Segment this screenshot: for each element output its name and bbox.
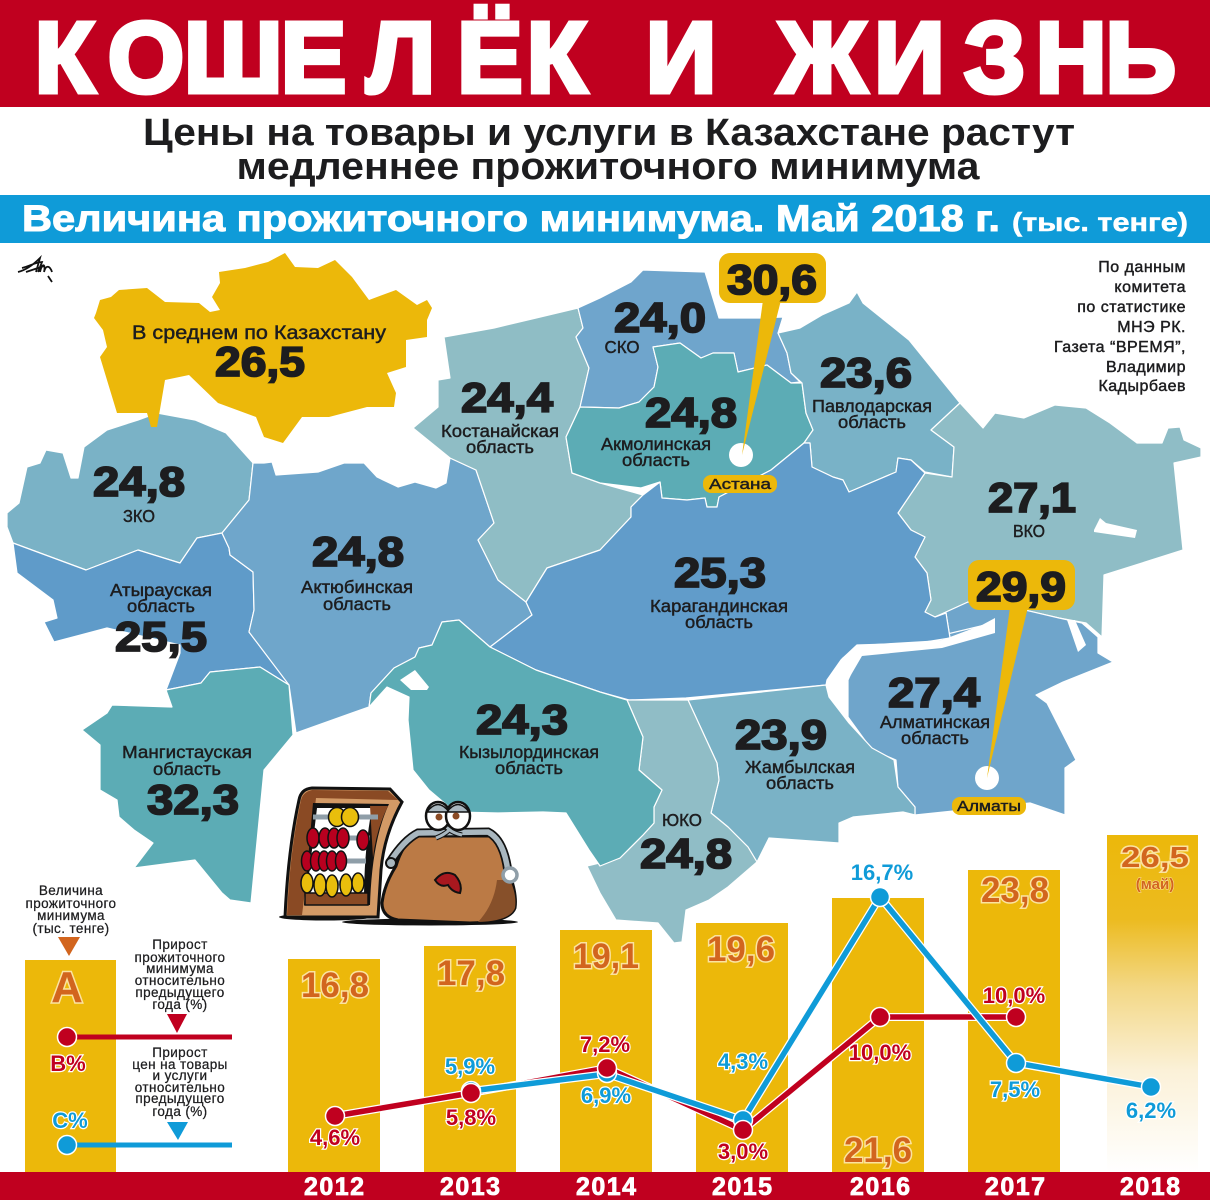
label: Мангистауская: область — [153, 759, 221, 779]
label: Павлодарская: область — [838, 412, 906, 432]
illustration: abacus — [279, 788, 402, 920]
line chart: living wage growth — [335, 1017, 1016, 1130]
mini map: average for Kazakhstan — [94, 253, 432, 443]
bar 2018 — [1107, 835, 1198, 1172]
label: Жамбылская: область — [766, 773, 834, 793]
blue percentage labels: 6,9% — [581, 1083, 631, 1108]
source note: Владимир — [1106, 359, 1186, 376]
legend caption: living wage — [26, 883, 116, 936]
legend caption: living wage growth: Прирост — [152, 937, 208, 952]
bar 2016 — [832, 898, 924, 1172]
label: Алматинская: область — [901, 728, 969, 748]
region: Акмолинская — [566, 343, 813, 507]
region: ЮКО — [587, 700, 757, 943]
red percentage labels: 7,2% — [580, 1032, 630, 1057]
label: ВКО: 27,1 — [988, 474, 1076, 521]
mini map: average for Kazakhstan: 26,5 — [215, 338, 305, 385]
label: Костанайская: Костанайская — [441, 421, 559, 441]
region: Алматинская — [848, 602, 1113, 815]
label: Павлодарская: 23,6 — [820, 349, 912, 396]
bar 2012 — [288, 959, 380, 1172]
red percentage labels: 5,8% — [446, 1105, 496, 1130]
blue percentage labels — [445, 860, 1176, 1123]
region: Павлодарская — [778, 292, 960, 492]
legend caption: living wage growth — [135, 937, 225, 1012]
label: Акмолинская: Акмолинская — [601, 434, 711, 454]
lake Alakol — [1067, 620, 1086, 652]
label: ЮКО: ЮКО — [662, 810, 702, 830]
region: Атырауская — [13, 533, 289, 690]
blue section heading — [0, 195, 1210, 243]
legend caption: price growth: цен на товары — [132, 1057, 228, 1072]
region: Мангистауская — [82, 667, 293, 903]
subtitle — [143, 112, 1075, 188]
bar 2017 — [968, 870, 1060, 1172]
label: СКО: 24,0 — [614, 294, 706, 341]
lake Balkhash — [828, 618, 995, 700]
bar 2014 — [560, 930, 652, 1172]
label: СКО — [604, 294, 706, 357]
label: Алматинская: Алматинская — [880, 712, 990, 732]
region: Карагандинская — [490, 443, 950, 700]
source note — [1054, 259, 1186, 395]
blue percentage labels: 5,9% — [445, 1054, 495, 1079]
value 2018: (май) — [1136, 876, 1174, 893]
callout: Астана 30,6: Астана — [709, 476, 772, 493]
bar 2015 — [696, 923, 788, 1172]
label: СКО: СКО — [604, 337, 640, 357]
callout: Алматы 29,9 — [952, 560, 1075, 815]
legend label B: В% — [50, 1051, 86, 1076]
label: Акмолинская: 24,8 — [645, 389, 737, 436]
label: Костанайская: 24,4 — [461, 374, 554, 421]
legend caption: price growth — [132, 1045, 228, 1119]
label: Акмолинская — [601, 389, 737, 470]
legend blue line — [58, 1136, 232, 1154]
label: Карагандинская — [650, 549, 788, 632]
value 2018: 26,5 — [1121, 842, 1189, 874]
region: ВКО — [898, 403, 1201, 637]
map of Kazakhstan regions — [7, 270, 1201, 943]
label: Карагандинская: Карагандинская — [650, 596, 788, 616]
icon: artist signature — [18, 258, 52, 282]
legend caption: price growth: года (%) — [152, 1104, 208, 1119]
legend caption: price growth: относительно — [135, 1080, 225, 1095]
label: Алматинская: 27,4 — [888, 669, 981, 716]
red percentage labels: 4,6% — [310, 1125, 360, 1150]
label: ЮКО — [640, 810, 732, 877]
legend caption: living wage growth: минимума — [146, 961, 214, 976]
icon: blue arrow — [167, 1122, 188, 1140]
label: Актюбинская — [301, 528, 413, 614]
lake in ВКО — [1094, 518, 1137, 538]
map labels — [93, 294, 1076, 877]
label: Жамбылская: Жамбылская — [745, 757, 855, 777]
source note: Газета “ВРЕМЯ”, — [1054, 339, 1186, 356]
legend red line — [58, 1028, 232, 1046]
label: Жамбылская: 23,9 — [735, 711, 827, 758]
source note: по статистике — [1077, 299, 1186, 316]
legend caption: living wage: (тыс. тенге) — [32, 921, 110, 936]
blue percentage labels: 16,7% — [851, 860, 913, 885]
value 2013: 17,8 — [437, 954, 505, 993]
source note: МНЭ РК. — [1117, 319, 1186, 336]
region: Актюбинская — [222, 458, 532, 733]
red percentage labels: 10,0% — [849, 1040, 911, 1065]
value 2016: 21,6 — [844, 1131, 912, 1170]
label: Актюбинская: область — [323, 594, 391, 614]
data points: living wage growth — [326, 1008, 1026, 1140]
region: Кызылординская — [369, 620, 662, 866]
illustration: wallet — [342, 802, 518, 926]
label: Мангистауская — [122, 742, 252, 823]
region: ЗКО — [7, 413, 253, 570]
label: Костанайская: область — [466, 437, 534, 457]
legend caption: living wage: минимума — [37, 908, 105, 923]
blue section heading: Величина прожиточного минимума. Май 2018 г. — [22, 198, 1000, 239]
legend caption: living wage growth: относительно — [135, 973, 225, 988]
legend label C: С% — [52, 1108, 88, 1133]
value 2012: 16,8 — [301, 966, 369, 1005]
legend bar and key — [25, 883, 232, 1172]
legend sample bar — [25, 960, 116, 1172]
callout: Астана 30,6 — [703, 253, 826, 493]
subtitle: Цены на товары и услуги в Казахстане растут — [143, 112, 1075, 154]
legend caption: living wage: Величина — [39, 883, 103, 898]
label: ЗКО: 24,8 — [93, 458, 185, 505]
label: Атырауская: область — [127, 596, 195, 616]
label: ЗКО — [93, 458, 185, 526]
bar 2013 — [424, 946, 516, 1172]
legend letter A: А — [51, 963, 83, 1012]
label: ЮКО: 24,8 — [640, 830, 732, 877]
icon: orange arrow — [58, 937, 80, 956]
region: Жамбылская — [688, 685, 915, 862]
label: Карагандинская: 25,3 — [674, 549, 766, 596]
value 2017: 23,8 — [981, 871, 1049, 910]
blue section heading: (тыс. тенге) — [1012, 207, 1188, 237]
label: Кызылординская: 24,3 — [476, 696, 568, 743]
legend caption: price growth: Прирост — [152, 1045, 208, 1060]
bar chart: living wage by year — [288, 835, 1198, 1172]
source note: По данным — [1098, 259, 1186, 276]
label: ЗКО: ЗКО — [123, 506, 155, 526]
label: Кызылординская: область — [495, 758, 563, 778]
label: Павлодарская — [812, 349, 932, 432]
year axis band — [0, 1172, 1210, 1200]
red percentage labels — [310, 983, 1045, 1164]
label: Атырауская: 25,5 — [115, 613, 207, 660]
subtitle: медленнее прожиточного минимума — [236, 146, 980, 188]
legend caption: living wage: прожиточного — [26, 896, 116, 911]
red percentage labels: 10,0% — [983, 983, 1045, 1008]
label: ВКО: ВКО — [1013, 521, 1045, 541]
source note: комитета — [1114, 279, 1186, 296]
title banner: КОШЕЛЁК И ЖИЗНЬ — [35, 1, 1176, 113]
label: Жамбылская — [735, 711, 855, 793]
source note: Кадырбаев — [1098, 378, 1186, 395]
label: Атырауская — [110, 580, 212, 660]
legend caption: living wage growth: предыдущего — [135, 985, 225, 1000]
label: Актюбинская: Актюбинская — [301, 577, 413, 597]
label: Атырауская: Атырауская — [110, 580, 212, 600]
blue percentage labels: 7,5% — [990, 1077, 1040, 1102]
label: ВКО — [988, 474, 1076, 541]
blue percentage labels: 4,3% — [718, 1049, 768, 1074]
lake Aral — [400, 670, 429, 690]
callout: Алматы 29,9: Алматы — [957, 798, 1021, 815]
label: Костанайская — [441, 374, 559, 457]
legend caption: price growth: предыдущего — [135, 1091, 225, 1106]
legend caption: living wage growth: года (%) — [152, 997, 208, 1012]
mini map: average for Kazakhstan: В среднем по Казахстану — [132, 323, 387, 344]
region: СКО — [576, 270, 800, 408]
line chart: price growth — [462, 888, 1160, 1130]
label: Кызылординская — [459, 696, 599, 778]
label: Павлодарская: Павлодарская — [812, 396, 932, 416]
callout: Астана 30,6: 30,6 — [727, 256, 817, 303]
value 2015: 19,6 — [707, 930, 775, 969]
icon: red arrow — [167, 1014, 187, 1033]
value 2014: 19,1 — [573, 937, 639, 976]
legend caption: price growth: и услуги — [153, 1068, 207, 1083]
callout: Алматы 29,9: 29,9 — [976, 563, 1066, 610]
label: Мангистауская: Мангистауская — [122, 742, 252, 762]
label: Кызылординская: Кызылординская — [459, 742, 599, 762]
red percentage labels: 3,0% — [718, 1139, 768, 1164]
label: Актюбинская: 24,8 — [312, 528, 404, 575]
label: Карагандинская: область — [685, 612, 753, 632]
label: Алматинская — [880, 669, 990, 748]
blue percentage labels: 6,2% — [1126, 1098, 1176, 1123]
label: Мангистауская: 32,3 — [147, 776, 239, 823]
label: Акмолинская: область — [622, 450, 690, 470]
value 2018 — [1121, 842, 1189, 893]
legend caption: living wage growth: прожиточного — [135, 950, 225, 965]
region: Костанайская — [413, 308, 643, 602]
